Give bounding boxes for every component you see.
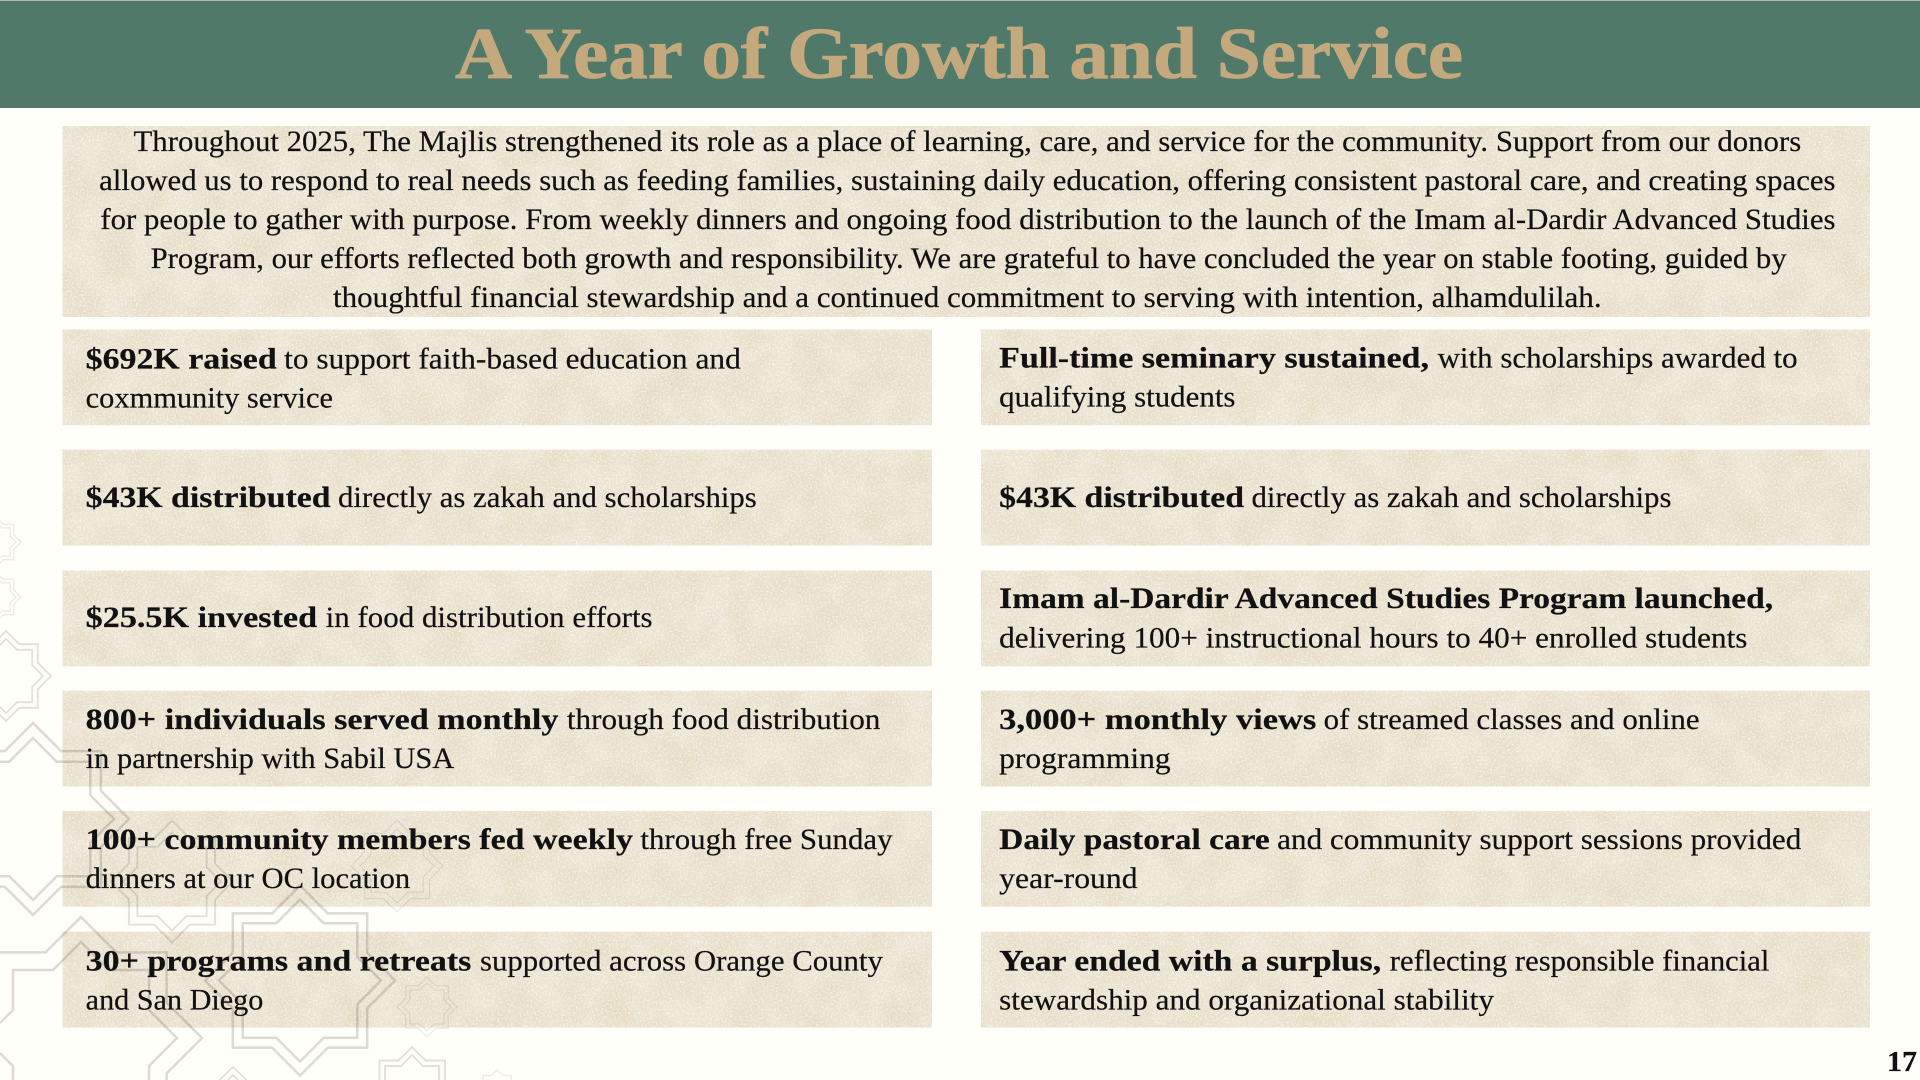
panel: daily pastoral care: year-round [999, 862, 1138, 895]
panel: $43K distributed (right): $43K distributed [999, 481, 1244, 514]
decorative star pattern, bottom left [0, 517, 511, 1080]
panel: 3,000+ monthly views: 3,000+ monthly views [999, 703, 1316, 736]
panel: introduction paragraph: allowed us to respond to real needs such as feeding families, sustaining daily education, offering consistent pastoral care, and creating spaces [99, 164, 1836, 197]
panel: 3,000+ monthly views: programming [999, 742, 1171, 775]
panel: 30+ programs and retreats: supported across Orange County [480, 944, 883, 978]
panel: 800+ individuals served: 800+ individuals served monthly [86, 703, 558, 736]
panel: introduction paragraph [62, 125, 1870, 317]
panel: 30+ programs and retreats: 30+ programs and retreats [86, 944, 471, 978]
panel: full-time seminary [981, 329, 1870, 425]
panel: 100+ community members fed: dinners at our OC location [86, 862, 410, 895]
panel: 100+ community members fed [62, 811, 932, 907]
panel: year-end surplus: Year ended with a surplus, [999, 944, 1381, 978]
panel: $43K distributed (right): directly as zakah and scholarships [1252, 481, 1672, 514]
panel: $43K distributed (left) [62, 450, 932, 546]
panel: $692K raised [62, 329, 932, 425]
panel: year-end surplus [981, 932, 1870, 1028]
panel: 30+ programs and retreats [62, 932, 932, 1028]
panel: year-end surplus: stewardship and organizational stability [999, 984, 1494, 1016]
panel: year-end surplus: reflecting responsible financial [1390, 944, 1769, 978]
panel: Imam al-Dardir program [981, 570, 1870, 666]
panel: $43K distributed (right) [981, 450, 1870, 546]
panel: 3,000+ monthly views [981, 691, 1870, 787]
panel: $25.5K invested: $25.5K invested [86, 601, 317, 634]
panel: $692K raised: to support faith-based education and [284, 342, 741, 376]
title: A Year of Growth and Service [455, 13, 1463, 94]
panel: $692K raised: $692K raised [86, 342, 277, 376]
panel: Imam al-Dardir program: Imam al-Dardir Advanced Studies Program launched, [999, 582, 1773, 615]
panel: $692K raised: coxmmunity service [86, 382, 333, 414]
panel: full-time seminary: qualifying students [999, 380, 1236, 414]
header banner [0, 0, 1920, 108]
panel: 800+ individuals served [62, 691, 932, 787]
panel: 800+ individuals served: in partnership with Sabil USA [86, 742, 455, 775]
panel: 3,000+ monthly views: of streamed classes and online [1324, 703, 1700, 736]
panel: introduction paragraph: thoughtful financial stewardship and a continued commitment to serving with intention, alhamdulilah. [333, 281, 1602, 314]
page number: 17 [1887, 1047, 1917, 1078]
panel: introduction paragraph: Throughout 2025, The Majlis strengthened its role as a place of learning, care, and service for the community. Support from our donors [134, 125, 1801, 158]
panel: daily pastoral care: Daily pastoral care [999, 823, 1270, 856]
panel: 30+ programs and retreats: and San Diego [86, 984, 263, 1016]
panel: full-time seminary: Full-time seminary sustained, [999, 342, 1429, 374]
panel: $25.5K invested: in food distribution efforts [326, 601, 653, 634]
panel: 800+ individuals served: through food distribution [567, 703, 880, 736]
panel: daily pastoral care: and community support sessions provided [1277, 823, 1801, 856]
panel: introduction paragraph: Program, our efforts reflected both growth and responsibility. We are grateful to have concluded the year on stable footing, guided by [151, 242, 1787, 275]
panel: Imam al-Dardir program: delivering 100+ instructional hours to 40+ enrolled students [999, 622, 1747, 654]
panel: $43K distributed (left): $43K distributed [86, 481, 331, 514]
panel: introduction paragraph: for people to gather with purpose. From weekly dinners and ongoing food distribution to the launch of the Imam al-Dardir Advanced Studies [100, 203, 1836, 236]
panel: 100+ community members fed: 100+ community members fed weekly [86, 823, 633, 856]
panel: daily pastoral care [981, 811, 1870, 907]
panel: full-time seminary: with scholarships awarded to [1438, 342, 1798, 374]
panel: $43K distributed (left): directly as zakah and scholarships [338, 481, 757, 514]
panel: $25.5K invested [62, 570, 932, 666]
panel: 100+ community members fed: through free Sunday [640, 823, 893, 856]
